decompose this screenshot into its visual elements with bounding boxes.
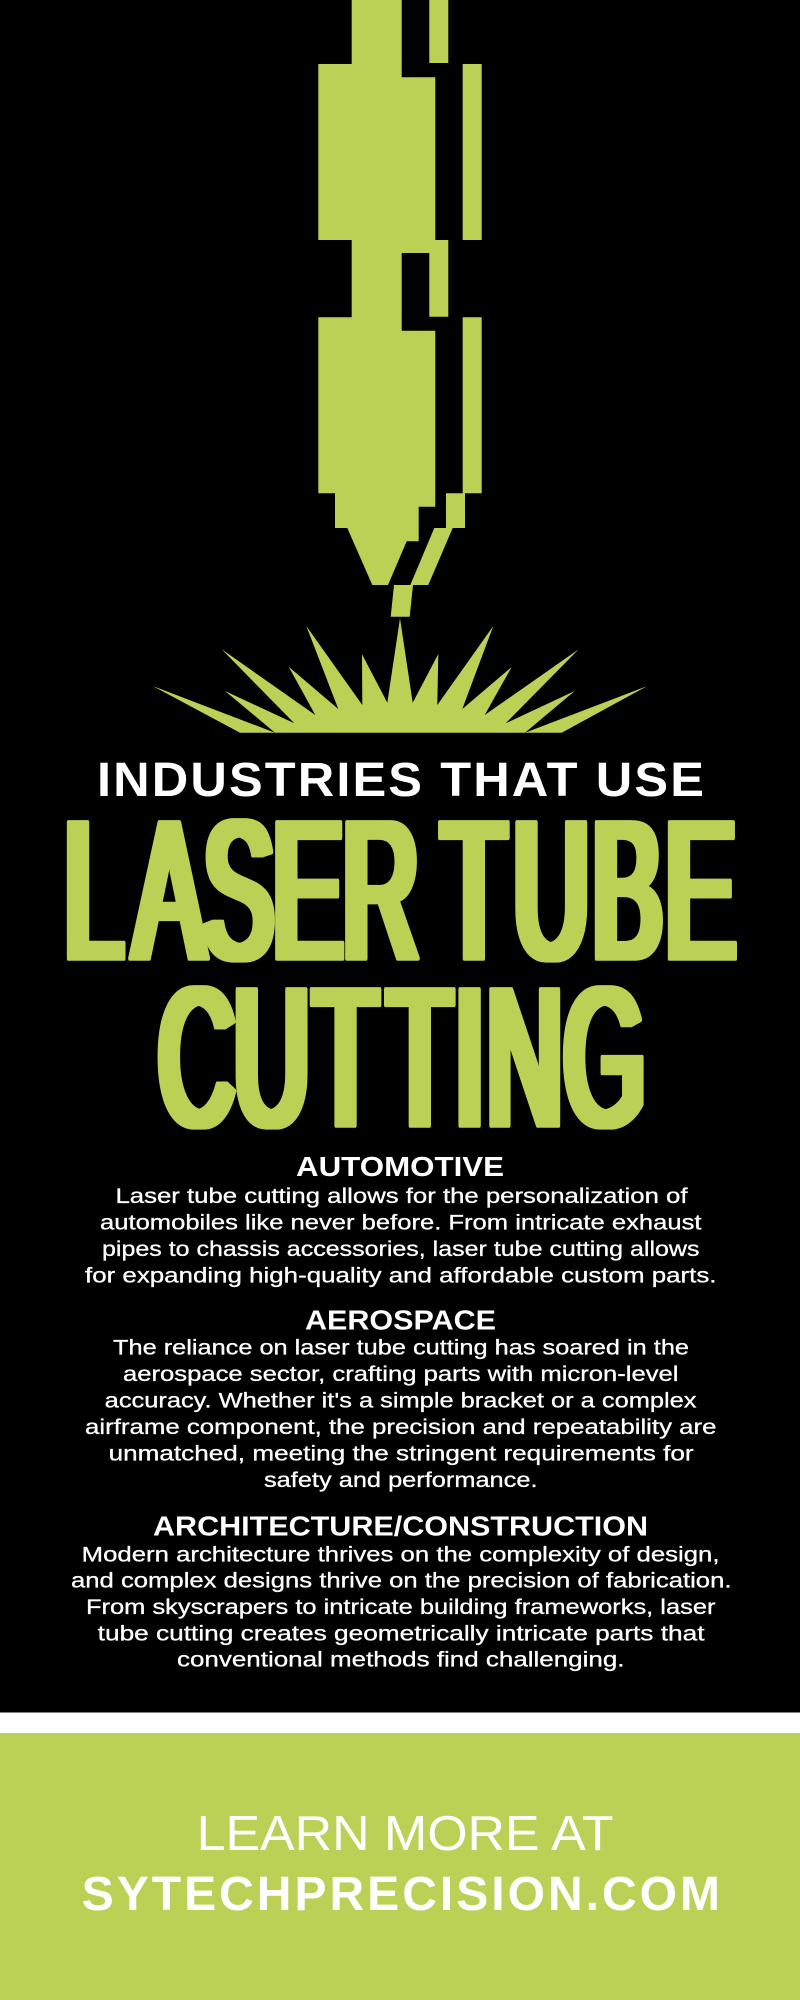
text block: automotive: for expanding high-quality and affordable custom parts. (85, 1264, 716, 1288)
text block: architecture/construction: From skyscrapers to intricate building frameworks, laser (86, 1596, 716, 1619)
text block: architecture/construction: and complex designs thrive on the precision of fabrication. (71, 1570, 732, 1593)
text block: architecture/construction: tube cutting creates geometrically intricate parts that (98, 1623, 705, 1646)
text block: aerospace: accuracy. Whether it's a simple bracket or a complex (105, 1390, 697, 1413)
icon: sunburst sparks (153, 618, 647, 733)
icon: laser nozzle (318, 0, 482, 617)
text block: automotive: Laser tube cutting allows for the personalization of (116, 1185, 688, 1208)
heading: automotive: AUTOMOTIVE (296, 1151, 504, 1182)
heading: architecture/construction: ARCHITECTURE/CONSTRUCTION (153, 1511, 648, 1542)
text block: aerospace: unmatched, meeting the stringent requirements for (109, 1443, 694, 1466)
text block: automotive: pipes to chassis accessories, laser tube cutting allows (102, 1238, 700, 1261)
text block: architecture/construction (71, 1544, 732, 1672)
panel: footer call to action (0, 1733, 800, 2000)
footer background (0, 1733, 800, 2000)
text block: aerospace: The reliance on laser tube cutting has soared in the (113, 1336, 689, 1360)
heading: aerospace: AEROSPACE (305, 1304, 496, 1336)
text block: aerospace: aerospace sector, crafting parts with micron-level (123, 1363, 678, 1386)
text block: aerospace (85, 1336, 716, 1492)
nozzle beam tip (391, 585, 413, 617)
text block: architecture/construction: conventional methods find challenging. (177, 1649, 624, 1672)
footer text: website: SYTECHPRECISION.COM (82, 1868, 720, 1921)
title line: laser tube: LASER TUBE (65, 781, 735, 1001)
text block: aerospace: safety and performance. (264, 1469, 538, 1492)
panel: aerospace (85, 1304, 716, 1492)
text block: architecture/construction: Modern architecture thrives on the complexity of design, (82, 1544, 719, 1567)
text block: automotive: automobiles like never before. From intricate exhaust (100, 1212, 702, 1234)
title line: cutting: CUTTING (159, 948, 645, 1168)
nozzle top right segment (429, 0, 448, 63)
panel: architecture/construction (71, 1511, 732, 1672)
title: laser tube cutting (65, 781, 735, 1168)
nozzle lower right segment (410, 317, 482, 585)
footer text: learn more at: LEARN MORE AT (197, 1807, 614, 1861)
nozzle main body and tip (318, 0, 448, 585)
text block: aerospace: airframe component, the precision and repeatability are (85, 1416, 716, 1439)
title: industries that use: INDUSTRIES THAT USE (97, 754, 706, 807)
text block: automotive (85, 1185, 716, 1288)
panel: automotive (85, 1151, 716, 1288)
nozzle upper right bar (463, 64, 482, 240)
